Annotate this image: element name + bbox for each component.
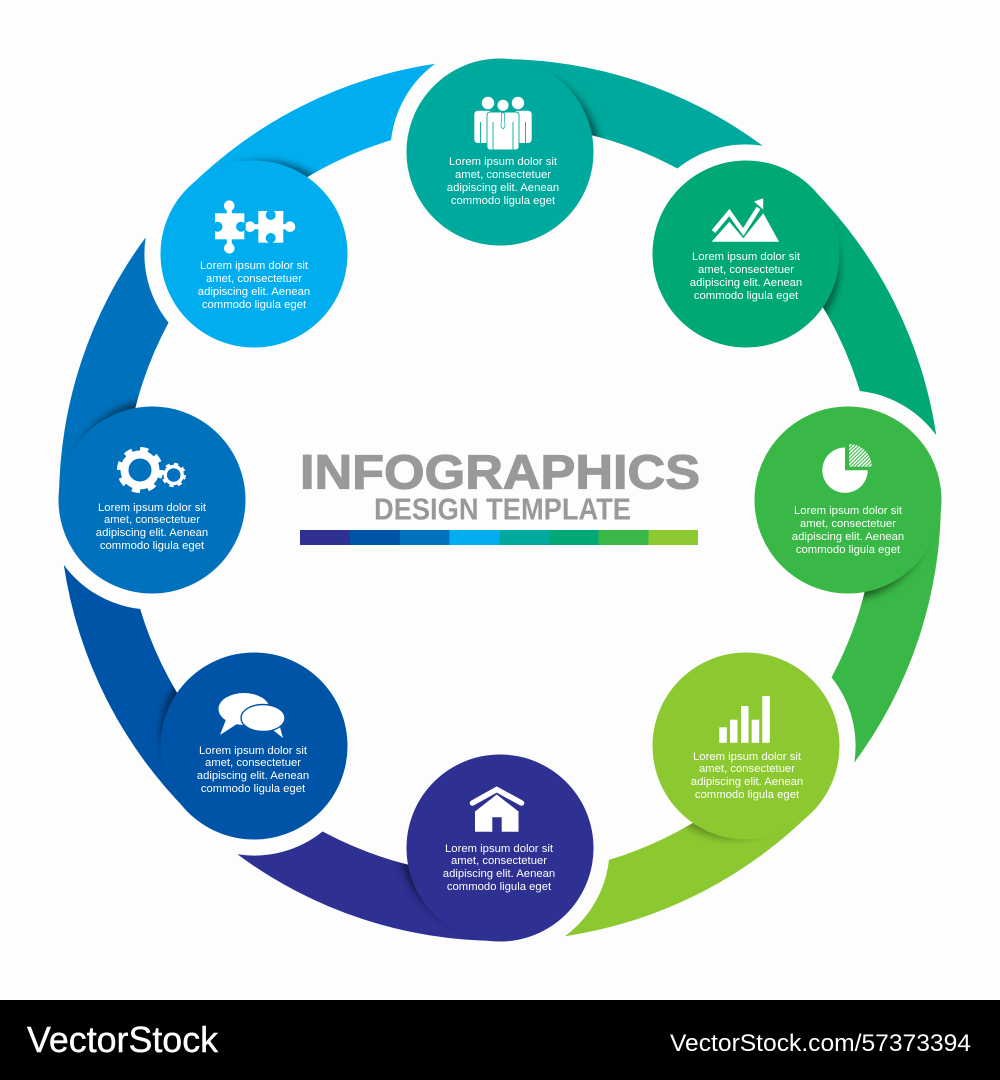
- ribbon: dark blue: [64, 565, 183, 806]
- text: people step: Lorem ipsum dolor sit: [449, 156, 558, 168]
- text: growth step: Lorem ipsum dolor sit: [692, 251, 801, 263]
- text: people step: adipiscing elit. Aenean: [447, 182, 559, 194]
- icon: puzzle pieces: [212, 200, 295, 254]
- panel: pie chart step: [754, 406, 942, 594]
- text: people step: amet, consectetuer: [455, 169, 551, 181]
- text: gears step: Lorem ipsum dolor sit: [98, 502, 207, 514]
- panel: growth step: [652, 160, 840, 348]
- ribbon: green: [816, 193, 936, 435]
- ribbon: sky blue: [194, 64, 435, 183]
- panel: people step: [406, 58, 594, 246]
- text: growth step: adipiscing elit. Aenean: [690, 277, 802, 289]
- icon: gears: [120, 450, 184, 490]
- text: people step: commodo ligula eget: [451, 195, 556, 207]
- text: growth step: commodo ligula eget: [694, 290, 799, 302]
- text: home step: commodo ligula eget: [447, 881, 552, 893]
- text: growth step: amet, consectetuer: [698, 264, 794, 276]
- text: home step: Lorem ipsum dolor sit: [445, 843, 554, 855]
- panel: chat step: [160, 652, 348, 840]
- color bar: [300, 530, 698, 545]
- text: pie chart step: amet, consectetuer: [800, 518, 896, 530]
- text: gears step: adipiscing elit. Aenean: [96, 527, 208, 539]
- ribbon: indigo: [238, 832, 490, 941]
- panel: gears step: [58, 406, 246, 594]
- text: gears step: amet, consectetuer: [104, 514, 200, 526]
- icon: house: [472, 790, 522, 832]
- text: puzzle step: amet, consectetuer: [206, 273, 302, 285]
- text: puzzle step: commodo ligula eget: [202, 299, 307, 311]
- subtitle: DESIGN TEMPLATE: [374, 492, 631, 527]
- text: chat step: commodo ligula eget: [201, 783, 306, 795]
- icon: mountain with arrow: [712, 199, 779, 242]
- text: home step: adipiscing elit. Aenean: [443, 868, 555, 880]
- icon: people: [474, 97, 532, 150]
- icon: bar chart: [719, 696, 770, 743]
- icon: pie chart: [822, 444, 872, 493]
- text: pie chart step: commodo ligula eget: [796, 544, 901, 556]
- text: gears step: commodo ligula eget: [100, 540, 205, 552]
- text: chat step: adipiscing elit. Aenean: [197, 770, 309, 782]
- ribbon: mid green: [832, 510, 941, 762]
- footer logo: VectorStock: [27, 1019, 219, 1060]
- text: puzzle step: Lorem ipsum dolor sit: [200, 260, 309, 272]
- text: bar chart step: amet, consectetuer: [699, 763, 795, 775]
- footer bar: [0, 1000, 1000, 1080]
- panel: bar chart step: [652, 652, 840, 840]
- title: INFOGRAPHICS: [300, 446, 700, 500]
- panel: home step: [406, 754, 594, 942]
- text: puzzle step: adipiscing elit. Aenean: [198, 286, 310, 298]
- panel: puzzle step: [160, 160, 348, 348]
- text: bar chart step: adipiscing elit. Aenean: [691, 776, 803, 788]
- icon: speech bubbles: [218, 693, 285, 738]
- ribbon: teal: [509, 59, 762, 168]
- ribbon: lime: [565, 817, 806, 936]
- text: home step: amet, consectetuer: [451, 855, 547, 867]
- ribbon: blue: [59, 238, 168, 490]
- text: chat step: amet, consectetuer: [205, 757, 301, 769]
- text: bar chart step: commodo ligula eget: [695, 789, 800, 801]
- footer url: VectorStock.com/57373394: [670, 1030, 971, 1057]
- text: bar chart step: Lorem ipsum dolor sit: [693, 751, 802, 763]
- text: pie chart step: Lorem ipsum dolor sit: [794, 505, 903, 517]
- text: pie chart step: adipiscing elit. Aenean: [792, 531, 904, 543]
- text: chat step: Lorem ipsum dolor sit: [199, 745, 308, 757]
